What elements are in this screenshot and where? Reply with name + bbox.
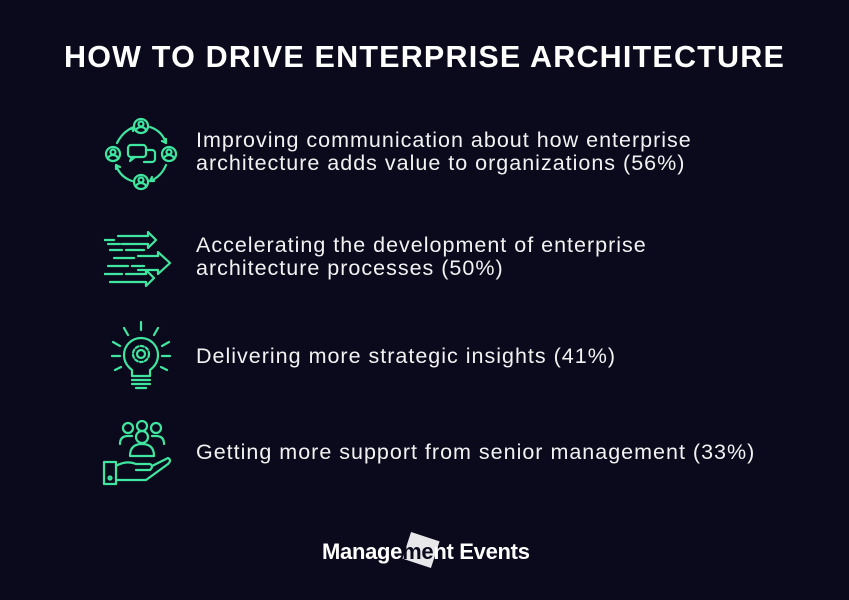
- text 2: [196, 233, 647, 280]
- icon: hand with people: [102, 420, 172, 486]
- text 1: architecture adds value to organizations (56%): [196, 151, 685, 175]
- title: HOW TO DRIVE ENTERPRISE ARCHITECTURE: [64, 40, 785, 74]
- text 3: Delivering more strategic insights (41%): [196, 344, 616, 368]
- logo: Management Events: [322, 539, 530, 564]
- text 2: architecture processes (50%): [196, 256, 504, 280]
- text 4: Getting more support from senior management (33%): [196, 440, 755, 464]
- text 1: [196, 128, 692, 175]
- text 1: Improving communication about how enterprise: [196, 128, 692, 152]
- icon: lightbulb: [110, 320, 172, 390]
- icon: communication cycle: [104, 118, 178, 190]
- icon: arrows: [104, 230, 172, 288]
- logo: [322, 532, 530, 568]
- text 2: Accelerating the development of enterprise: [196, 233, 647, 257]
